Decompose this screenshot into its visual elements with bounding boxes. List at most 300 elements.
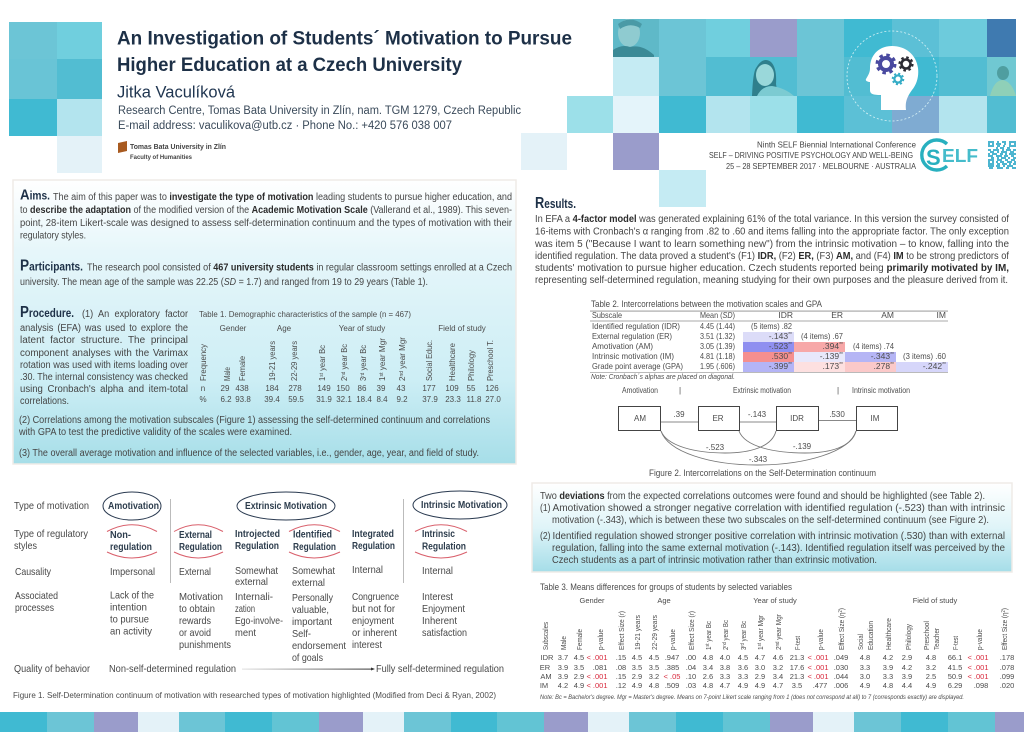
table 2: intercorrelations: .173	[823, 361, 839, 371]
associated processes row: enjoyment	[352, 615, 394, 627]
table 3: means differences: 2.9	[902, 653, 912, 662]
table 3: means differences: .04	[686, 663, 696, 672]
table 3: means differences: AM	[540, 672, 552, 681]
procedure	[18, 304, 490, 459]
table 3: means differences: < .001	[586, 653, 608, 662]
procedure: using Cronbach's alpha and item-total	[20, 384, 188, 395]
table 3: means differences: < .001	[807, 672, 829, 681]
table 3: means differences: year Bc	[704, 621, 713, 643]
table 3: means differences: Teacher	[932, 628, 941, 650]
figure 2: correlation diagram: Amotivation	[622, 386, 658, 395]
table 2: intercorrelations: **	[890, 352, 894, 358]
table 1: demographics: 86	[358, 384, 367, 393]
table 3: means differences: .385	[665, 663, 679, 672]
table 3: means differences: 3.2	[649, 672, 659, 681]
table 3: means differences: 1	[756, 646, 765, 650]
table 3: means differences: .477	[813, 681, 827, 690]
table 3: means differences: year Mgr	[774, 614, 783, 642]
logo: SELF	[922, 140, 978, 170]
procedure: analysis (EFA) was used to explore the	[20, 323, 188, 334]
aims: Aims.	[20, 186, 50, 204]
table 3: means differences: 4.8	[860, 653, 870, 662]
aims: The aim of this paper was to investigate the type of motivation leading students to pursue higher education, and	[53, 192, 512, 203]
table 3: means differences: 2	[774, 646, 783, 650]
results text: was item 5 ("Because I want to learn something new") from the intrinsic motivation – to know, falling into the	[534, 239, 1009, 250]
table 3: means differences: 2.9	[574, 672, 584, 681]
table 3: means differences: .509	[665, 681, 679, 690]
table 3: means differences: 4.2	[902, 663, 912, 672]
figure 2: correlation diagram: Extrinsic motivation	[733, 386, 791, 395]
associated processes row: of goals	[292, 652, 323, 664]
table 3: means differences: < .001	[967, 653, 989, 662]
table 3: means differences: p-value	[596, 629, 605, 650]
results text: In EFA a 4-factor model was generated explaining 61% of the total variance. In this version the survey consisted of	[535, 214, 1009, 225]
table 3: means differences: 3	[739, 646, 748, 650]
university logo: Tomas Bata University in Zlín	[130, 142, 226, 151]
table 1: demographics: year Mgr	[398, 337, 407, 371]
table 2: intercorrelations: **	[788, 352, 792, 358]
table 1: demographics: 109	[445, 384, 459, 393]
row labels: Associated	[15, 590, 58, 602]
table 3: means differences: .081	[593, 663, 607, 672]
table 2: intercorrelations: ER	[831, 310, 843, 320]
table 3: means differences: nd	[775, 641, 781, 646]
table 1: demographics: Gender	[220, 324, 247, 333]
table 3: means differences: 4.8	[649, 681, 659, 690]
row labels: Type of regulatory	[14, 528, 89, 540]
regulatory style headings with red arcs: Intrinsic	[422, 528, 455, 540]
table 3: means differences: 3.2	[773, 663, 783, 672]
table 3: means differences	[540, 582, 1014, 701]
table 3: means differences: 4.8	[883, 681, 893, 690]
table 3: means differences: 4.5	[738, 653, 748, 662]
panel: aims, participants, procedure	[13, 180, 516, 464]
panel: deviations: Identified regulation showed stronger positive correlation with intrinsic motivation (.530) than with external	[552, 531, 1005, 542]
table 3: means differences: < .001	[967, 663, 989, 672]
procedure: component analyses with the Varimax	[20, 348, 188, 359]
table 3: means differences: 4.5	[574, 653, 584, 662]
table 3: means differences: 4.4	[902, 681, 912, 690]
table 3: means differences: st	[705, 643, 711, 647]
photo: woman, centre tile	[752, 60, 794, 96]
causality row: Internal	[352, 564, 383, 576]
table 3: means differences: Female	[575, 629, 584, 650]
figure 2: correlation diagram: |	[837, 386, 839, 395]
associated processes row: but not for	[352, 603, 395, 615]
figure 2: correlation diagram: -.343	[749, 455, 768, 464]
table 3: means differences: 2.6	[703, 672, 713, 681]
table 3: means differences: 4.0	[720, 653, 730, 662]
procedure: with GPA to test the predictive validity of the scales were examined.	[18, 427, 292, 438]
table 2: intercorrelations: **	[839, 352, 843, 358]
causality row: Somewhat	[292, 565, 335, 577]
participants: Participants.	[20, 258, 83, 274]
table 3: means differences: 3.5	[649, 663, 659, 672]
aims	[20, 186, 513, 242]
table 2: intercorrelations: (3 items) .60	[903, 351, 946, 361]
table 1: demographics: Age	[277, 324, 292, 333]
table 2: intercorrelations: External regulation (ER)	[592, 331, 672, 341]
table 3: means differences: 4.5	[649, 653, 659, 662]
procedure: Procedure.	[20, 304, 74, 321]
table 2: intercorrelations: 4.81 (1.18)	[700, 351, 735, 361]
table 3: means differences: F-test	[793, 635, 802, 650]
aims: point, 28-item Likert-scale was designed to assess self-determination continuum and the types of motivation with their	[20, 218, 513, 229]
table 1: demographics: 11.8	[467, 395, 482, 404]
table 3: means differences: 3.7	[558, 653, 568, 662]
row labels: processes	[15, 602, 54, 614]
table 2: intercorrelations: -.139	[820, 351, 839, 361]
table 1: demographics: 6.2	[220, 395, 232, 404]
figure 2: correlation diagram: AM	[634, 414, 646, 423]
table 3: means differences: Philology	[904, 624, 913, 650]
table 2: intercorrelations: -.242	[923, 361, 942, 371]
table 2: intercorrelations: Mean (SD)	[700, 310, 735, 320]
arrow: quality of behavior scale	[109, 663, 504, 675]
table 3: means differences: .00	[686, 653, 696, 662]
table 1: demographics: 22-29 years	[290, 341, 299, 381]
aims: to describe the adaptation of the modified version of the Academic Motivation Scale (Vallerand et al., 1989). This seven-	[20, 205, 512, 216]
figure 2: correlation diagram: IDR	[790, 414, 804, 423]
associated processes row: Inherent	[422, 615, 457, 627]
causality row: External	[179, 566, 211, 578]
table 3: means differences: .006	[834, 681, 848, 690]
causality row: Somewhat	[235, 565, 278, 577]
table 1: demographics	[199, 310, 501, 404]
table 3: means differences: 1	[704, 646, 713, 650]
causality row	[110, 564, 453, 589]
conference information	[709, 140, 917, 171]
table 3: means differences: 3.3	[720, 672, 730, 681]
table 1: demographics: 8.4	[376, 395, 388, 404]
table 2: intercorrelations: IDR	[778, 310, 793, 320]
table 3: means differences: 3.0	[755, 663, 765, 672]
table 1: demographics: 2	[340, 377, 349, 381]
table 3: means differences: year Bc	[739, 621, 748, 643]
regulatory style headings with red arcs: Identified	[293, 528, 332, 540]
table 3: means differences: Effect Size (η	[1000, 606, 1009, 650]
figure 2: correlation diagram: .39	[673, 410, 685, 419]
regulatory style headings with red arcs: Non-	[110, 529, 131, 541]
table 1: demographics: 32.1	[336, 395, 352, 404]
table 2: intercorrelations: **	[839, 342, 843, 348]
table 1: demographics: 59.5	[288, 395, 304, 404]
table 2: intercorrelations: 4.45 (1.44)	[700, 321, 735, 331]
table 1: demographics: Female	[238, 355, 247, 381]
table 3: means differences: Education	[866, 621, 875, 650]
figure 1 caption: Figure 1. Self-Determination continuum of motivation with researched types of motivation highlighted (Modified from Deci & Ryan, 2002)	[13, 690, 496, 700]
table 2: intercorrelations	[590, 299, 948, 381]
table 1: demographics: 43	[397, 384, 406, 393]
table 3: means differences: < .001	[807, 653, 829, 662]
table 1: demographics: Healthcare	[448, 342, 457, 381]
table 1: demographics: 438	[235, 384, 249, 393]
table 1: demographics: 31.9	[316, 395, 332, 404]
table 2: intercorrelations: Amotivation (AM)	[592, 341, 653, 351]
table 3: means differences: .03	[686, 681, 696, 690]
table 2: intercorrelations: -.343	[871, 351, 890, 361]
table 3: means differences: < .05	[664, 672, 680, 681]
associated processes row: or avoid	[179, 627, 211, 639]
table 2: intercorrelations: (4 items) .74	[853, 341, 894, 351]
table 3: means differences: .030	[834, 663, 848, 672]
title: Higher Education at a Czech University	[117, 55, 462, 76]
procedure: .30. The internal consistency was checked	[20, 372, 188, 383]
affiliation and contact	[118, 105, 521, 132]
table 1: demographics: 177	[422, 384, 436, 393]
associated processes row: Lack of the	[110, 590, 154, 602]
table 1: demographics: 278	[288, 384, 302, 393]
procedure: rotation was used with items loading over	[20, 360, 189, 371]
table 3: means differences: 21.3	[790, 653, 804, 662]
table 2: intercorrelations: AM	[881, 310, 894, 320]
regulatory style headings with red arcs: Regulation	[352, 540, 395, 552]
table 3: means differences: 19-21 years	[633, 615, 642, 650]
results text	[534, 195, 1009, 286]
table 3: means differences: Field of study	[913, 596, 958, 605]
table 3: means differences: 6.29	[948, 681, 962, 690]
panel: deviations: regulation, falling into the same external motivation (-.143). Identified regulation itself was perceived by the	[552, 543, 1005, 554]
table 1: demographics: rd	[360, 372, 366, 377]
table 1: demographics: 149	[317, 384, 331, 393]
results text: identified regulation. The data proved a student's (F1) IDR, (F2) ER, (F3) AM, and (F4) IM to be strong predictors of	[535, 251, 1009, 262]
table 3: means differences: 3.9	[558, 672, 568, 681]
table 2: intercorrelations: (5 items) .82	[751, 321, 792, 331]
table 1: demographics: Social Educ.	[425, 340, 434, 381]
table 2: intercorrelations: Subscale	[592, 310, 622, 320]
table 3: means differences: nd	[722, 642, 728, 647]
decorative banner mosaic: top right	[521, 19, 1016, 207]
table 3: means differences: p-value	[816, 629, 825, 650]
table 3: means differences: 4.9	[632, 681, 642, 690]
table 3: means differences: Note: Bc = Bachelor's degree. Mgr = Master's degree. Means on 7-point Likert scale ranging from 1 (does not correspond at all) to 7 (corresponds exactly) are displayed.	[540, 694, 964, 701]
table 3: means differences: 3.4	[773, 672, 783, 681]
associated processes row: punishments	[179, 639, 231, 651]
associated processes row: Internali-	[235, 591, 273, 603]
table 3: means differences: 3.5	[792, 681, 802, 690]
associated processes row	[110, 590, 467, 664]
table 2: intercorrelations: Identified regulation (IDR)	[592, 321, 680, 331]
panel: deviations: (1)	[540, 503, 550, 514]
table 3: means differences: IM	[540, 681, 548, 690]
table 2: intercorrelations: 1.95 (.606)	[700, 361, 735, 371]
table 1: demographics: 3	[359, 377, 368, 381]
table 2: intercorrelations: -.399	[769, 361, 788, 371]
panel: deviations: Czech students as a part of intrinsic motivation rather than extrinsic motivation.	[552, 555, 877, 566]
results text: students' motivation to pursue higher education. Czech students reported being primarily motivated by IM,	[535, 263, 1009, 274]
table 1: demographics: 55	[467, 384, 476, 393]
regulatory style headings with red arcs: Introjected	[235, 528, 280, 540]
table 3: means differences: .020	[1000, 681, 1014, 690]
table 1: demographics: Table 1. Demographic characteristics of the sample (n = 467)	[199, 310, 411, 319]
motivation type ellipses: Amotivation	[108, 500, 159, 512]
table 3: means differences: Gender	[579, 596, 605, 605]
table 3: means differences: < .001	[967, 672, 989, 681]
regulatory style headings with red arcs: Regulation	[179, 541, 222, 553]
table 1: demographics: 184	[265, 384, 279, 393]
table 1: demographics: st	[319, 372, 325, 377]
procedure: (1) An exploratory factor	[82, 309, 189, 320]
table 3: means differences: 4.2	[883, 653, 893, 662]
arrow: quality of behavior scale: Non-self-determined regulation	[109, 663, 236, 675]
table 3: means differences: 4.9	[738, 681, 748, 690]
table 3: means differences: 3.5	[574, 663, 584, 672]
table 1: demographics: 29	[221, 384, 230, 393]
table 1: demographics: Philology	[467, 350, 476, 381]
table 1: demographics: 18.4	[356, 395, 372, 404]
table 1: demographics: 19-21 years	[268, 341, 277, 381]
table 3: means differences: Subscales	[541, 622, 550, 650]
table 1: demographics: 150	[336, 384, 350, 393]
author: Jitka Vaculíková	[117, 82, 236, 102]
table 1: demographics: nd	[341, 371, 347, 377]
table 1: demographics: 93.8	[235, 395, 251, 404]
figure 2: correlation diagram: -.139	[793, 442, 812, 451]
procedure: latent factor structure. The principal	[20, 335, 188, 346]
table 3: means differences: p-value	[668, 629, 677, 650]
table 2: intercorrelations: Intrinsic motivation (IM)	[592, 351, 674, 361]
table 2: intercorrelations: Grade point average (GPA)	[592, 361, 683, 371]
table 1: demographics: 9.2	[396, 395, 408, 404]
table 3: means differences: 3.9	[558, 663, 568, 672]
panel: deviations: Amotivation showed a stronger negative correlation with identified regulation (-.523) than with intrinsic	[552, 503, 1005, 514]
table 3: means differences: 3.9	[883, 663, 893, 672]
figure 1: self-determination continuum	[13, 491, 507, 700]
table 3: means differences: 17.6	[790, 663, 804, 672]
table 3: means differences: 3.9	[902, 672, 912, 681]
table 3: means differences: 4.8	[703, 681, 713, 690]
table 3: means differences: 2	[1001, 610, 1007, 612]
table 3: means differences: 2	[721, 646, 730, 650]
regulatory style headings with red arcs: Regulation	[422, 540, 466, 552]
table 3: means differences: st	[757, 642, 763, 646]
table 3: means differences: Effect Size (r)	[687, 611, 696, 650]
table 3: means differences: Age	[657, 596, 671, 605]
procedure: (2) Correlations among the motivation subscales (Figure 1) assessing the self-determined continuum and correlations	[19, 415, 490, 426]
table 3: means differences: 4.7	[755, 653, 765, 662]
row labels	[14, 500, 90, 675]
row labels: styles	[14, 540, 37, 552]
associated processes row: Enjoyment	[422, 603, 465, 615]
table 3: means differences: 41.5	[948, 663, 962, 672]
row labels: Type of motivation	[14, 500, 89, 512]
participants	[20, 258, 512, 288]
table 3: means differences: 3.6	[738, 663, 748, 672]
figure 2: correlation diagram	[618, 386, 910, 465]
QR code	[988, 142, 1016, 168]
table 1: demographics: Male	[223, 367, 232, 381]
procedure: (3) The overall average motivation and influence of the selected variables, i.e., gender, age, year, and field of study.	[19, 448, 479, 459]
table 3: means differences: .15	[616, 672, 626, 681]
table 3: means differences: 4.8	[703, 653, 713, 662]
table 3: means differences: year Mgr	[756, 615, 765, 643]
table 2: intercorrelations: **	[942, 362, 946, 368]
table 2: intercorrelations: IM	[937, 310, 946, 320]
conference information: SELF – DRIVING POSITIVE PSYCHOLOGY AND WELL-BEING	[709, 151, 913, 160]
table 3: means differences: Preschool	[922, 621, 931, 650]
table 3: means differences: )	[1000, 608, 1009, 610]
table 2: intercorrelations: Table 2. Intercorrelations between the motivation scales and GPA	[591, 299, 822, 309]
table 2: intercorrelations: **	[839, 362, 843, 368]
table 3: means differences: < .001	[586, 681, 608, 690]
associated processes row: Personally	[292, 592, 334, 604]
associated processes row: satisfaction	[422, 627, 467, 639]
table 3: means differences: 2.9	[755, 672, 765, 681]
table 2: intercorrelations: -.523	[769, 341, 788, 351]
figure 2: correlation diagram: IM	[871, 414, 880, 423]
table 2: intercorrelations: Note: Cronbach´s alphas are placed on diagonal.	[591, 374, 735, 381]
title: An Investigation of Students´ Motivation to Pursue	[117, 28, 572, 50]
table 3: means differences: rd	[740, 643, 746, 647]
table 3: means differences: )	[837, 608, 846, 610]
regulatory style headings with red arcs: External	[179, 529, 212, 541]
table 3: means differences: .049	[834, 653, 848, 662]
table 3: means differences: 3.8	[720, 663, 730, 672]
figure 2: correlation diagram: |	[679, 386, 681, 395]
panel: deviations: Two deviations from the expected correlations outcomes were found and should be highlighted (see Table 2).	[540, 491, 985, 502]
table 3: means differences: 3.3	[860, 663, 870, 672]
associated processes row: zation	[235, 603, 255, 615]
table 3: means differences: Year of study	[753, 596, 797, 605]
table 3: means differences: .12	[616, 681, 626, 690]
table 2: intercorrelations: -.143	[769, 331, 788, 341]
table 3: means differences: 66.1	[948, 653, 962, 662]
table 3: means differences: 4.7	[773, 681, 783, 690]
table 3: means differences: 2.9	[632, 672, 642, 681]
table 3: means differences: 3.4	[703, 663, 713, 672]
table 3: means differences: .10	[686, 672, 696, 681]
table 3: means differences: F-test	[951, 635, 960, 650]
figure 2: correlation diagram: ER	[712, 414, 724, 423]
table 3: means differences: .178	[1000, 653, 1014, 662]
row labels: Quality of behavior	[14, 663, 90, 675]
associated processes row: to pursue	[110, 614, 149, 626]
associated processes row: endorsement	[292, 640, 346, 652]
conference information: 25 – 28 SEPTEMBER 2017 · MELBOURNE · AUSTRALIA	[726, 162, 917, 171]
figure 2 caption: Figure 2. Intercorrelations on the Self-Determination continuum	[649, 468, 876, 478]
table 2: intercorrelations: .530	[772, 351, 788, 361]
table 3: means differences: 4.9	[926, 681, 936, 690]
affiliation and contact: Research Centre, Tomas Bata University in Zlín, nam. TGM 1279, Czech Republic	[118, 105, 521, 117]
table 2: intercorrelations: .394	[823, 341, 839, 351]
table 3: means differences: Male	[559, 636, 568, 650]
panel: deviations: (2)	[540, 531, 550, 542]
table 3: means differences: 4.5	[632, 653, 642, 662]
table 3: means differences: 3.3	[883, 672, 893, 681]
causality row: Internal	[422, 565, 453, 577]
table 3: means differences: .099	[1000, 672, 1014, 681]
table 1: demographics: 1	[318, 377, 327, 381]
icon: head with gears	[847, 31, 937, 121]
table 3: means differences: 4.9	[574, 681, 584, 690]
table 2: intercorrelations: (4 items) .67	[801, 331, 843, 341]
table 3: means differences: 4.9	[755, 681, 765, 690]
decorative squares: top left	[9, 22, 102, 173]
associated processes row: Self-	[292, 628, 311, 640]
associated processes row: Motivation	[179, 591, 223, 603]
table 3: means differences: 50.9	[948, 672, 962, 681]
causality row: Impersonal	[110, 566, 155, 578]
table 3: means differences: Effect Size (r)	[617, 611, 626, 650]
table 3: means differences: Effect Size (η	[837, 606, 846, 650]
table 3: means differences: 2	[838, 610, 844, 612]
photo: person, right tile	[990, 66, 1016, 96]
table 3: means differences: < .001	[807, 663, 829, 672]
table 3: means differences: < .001	[586, 672, 608, 681]
associated processes row: Congruence	[352, 591, 399, 603]
table 1: demographics: Preschool T.	[486, 340, 495, 381]
table 1: demographics: year Mgr	[378, 338, 387, 372]
